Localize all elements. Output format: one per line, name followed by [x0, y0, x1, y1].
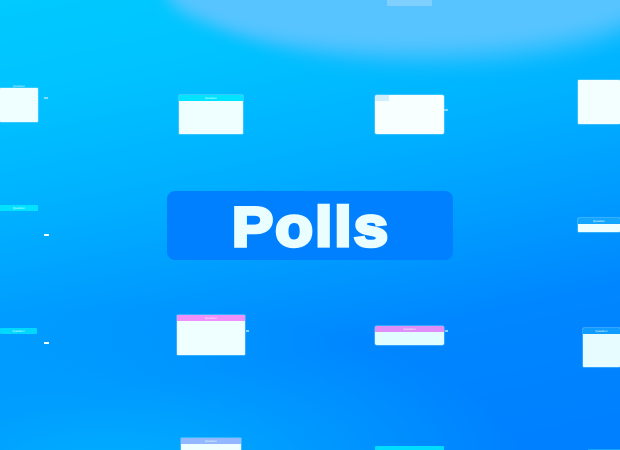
header: [583, 328, 620, 334]
top glow inner: [165, 0, 620, 50]
title panel: [167, 191, 453, 260]
title: Polls: [232, 195, 390, 258]
poll card: top left: [0, 84, 39, 123]
tag: lower left: [44, 342, 49, 344]
top glow outer: [215, 0, 620, 65]
header text: Question: [595, 329, 608, 333]
header: [578, 218, 620, 224]
header: [375, 326, 444, 332]
tag: top middle right: [444, 109, 448, 111]
tag: top left: [44, 97, 48, 99]
tag: middle left: [44, 234, 49, 236]
header: [181, 438, 241, 444]
header swatch: [375, 95, 389, 101]
poll card: bottom centre: [181, 438, 241, 450]
header text: Question: [12, 329, 24, 333]
tag: lower middle right: [445, 330, 448, 332]
header text: Question: [593, 219, 605, 223]
header text: Question: [13, 206, 25, 210]
top strip: [387, 0, 432, 6]
poll header: lower left: [0, 328, 37, 334]
header: [179, 95, 243, 101]
poll header: middle left: [0, 205, 38, 211]
poll card: middle right: [578, 218, 620, 232]
header text: Question: [13, 84, 25, 88]
poll card: lower right: [583, 328, 620, 367]
poll card: lower centre: [177, 315, 245, 355]
poll card: top centre: [179, 95, 243, 134]
header text: Question: [403, 327, 416, 331]
poll card: top middle right: [375, 95, 444, 134]
header text: Question: [205, 439, 217, 443]
tag: lower centre: [246, 330, 249, 332]
card body: [0, 88, 38, 122]
header text: Question: [205, 96, 217, 100]
header text: Question: [205, 316, 217, 320]
header: [177, 315, 245, 321]
poll card: top right: [578, 80, 620, 124]
poll header: bottom middle right: [375, 446, 444, 450]
poll card: lower middle right: [375, 326, 444, 345]
poll header: bottom right: [588, 449, 620, 450]
